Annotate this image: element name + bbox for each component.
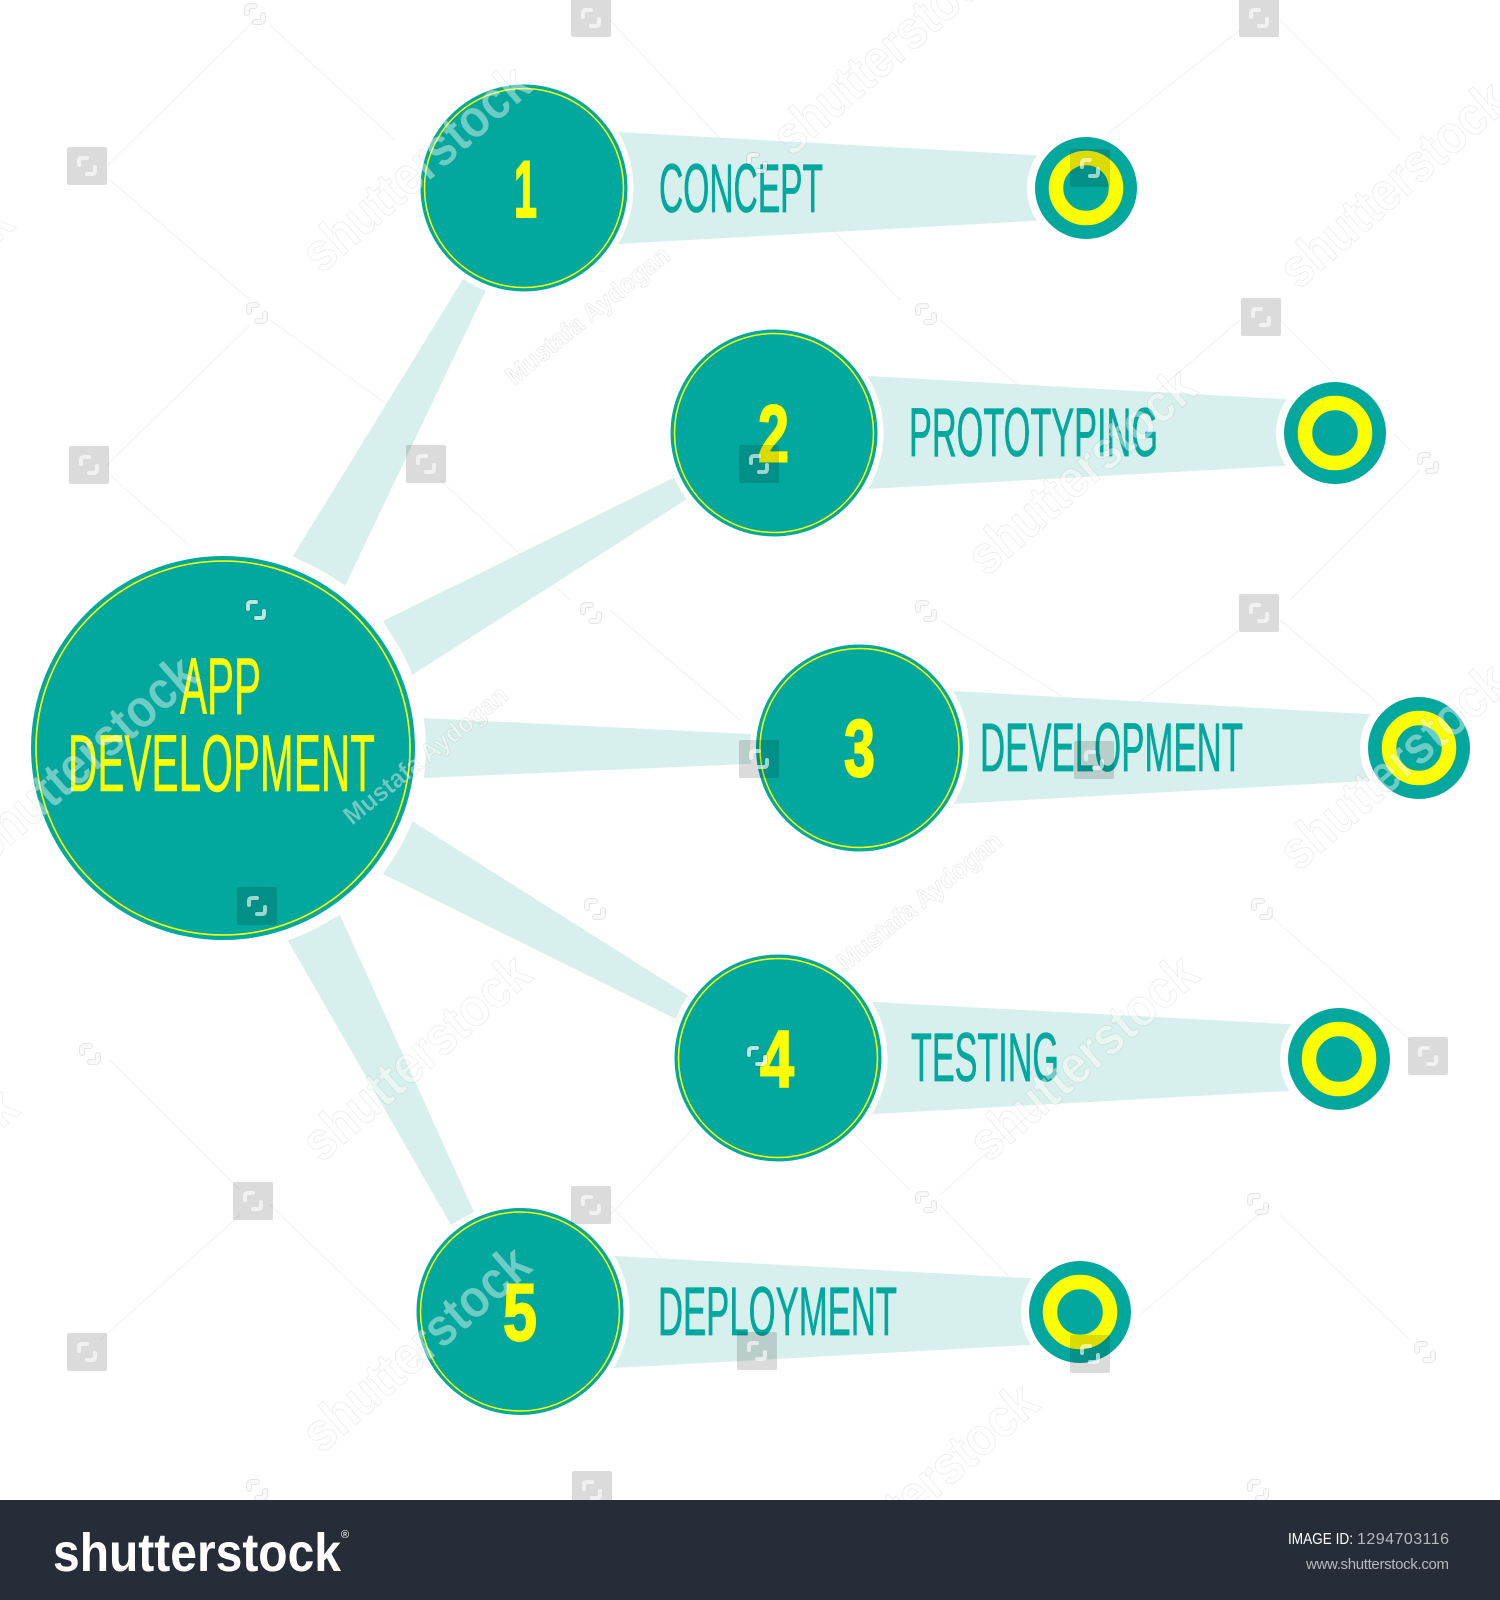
node 2: prototyping	[664, 324, 1394, 542]
node 3: development: 3	[844, 704, 875, 794]
hub: app development	[20, 545, 426, 951]
node 5: deployment	[410, 1202, 1139, 1421]
node 4: testing	[668, 948, 1398, 1168]
hub title: APP	[180, 642, 261, 732]
hub title	[68, 642, 375, 809]
node 4: testing: 4	[760, 1015, 794, 1105]
node 1: concept: CONCEPT	[659, 150, 823, 227]
watermark overlay: Mustafa Aydogan	[499, 239, 676, 391]
image id number: 1294703116	[1357, 1531, 1449, 1548]
node 3: development: DEVELOPMENT	[980, 709, 1243, 786]
watermark overlay: shutterstock	[290, 1233, 543, 1464]
watermark overlay: shutterstock	[797, 1371, 1050, 1600]
watermark overlay: shutterstock	[955, 356, 1208, 587]
logo registered mark: ®	[341, 1529, 349, 1541]
hub title: DEVELOPMENT	[68, 719, 375, 809]
node 2: prototyping: 2	[758, 390, 789, 480]
node 3: development	[750, 638, 1478, 858]
node 5: deployment: DEPLOYMENT	[658, 1273, 897, 1350]
watermark overlay: shutterstock	[290, 942, 543, 1173]
watermark overlay: Mustafa Aydogan	[831, 825, 1008, 977]
image id: IMAGE ID:	[1288, 1531, 1353, 1548]
footer logo: shutterstock	[53, 1523, 342, 1583]
watermark overlay: shutterstock	[957, 942, 1210, 1173]
watermark overlay: shutterstock	[290, 53, 543, 284]
website: www.shutterstock.com	[1305, 1556, 1449, 1573]
footer bar	[0, 1500, 1500, 1600]
node 4: testing: TESTING	[911, 1019, 1059, 1096]
node 5: deployment: 5	[503, 1268, 537, 1358]
watermark overlay: Mustafa Aydogan	[337, 679, 514, 831]
node 1: concept: 1	[514, 145, 537, 235]
connectors from hub to nodes	[287, 279, 770, 1225]
node 2: prototyping: PROTOTYPING	[909, 394, 1158, 471]
node 1: concept	[414, 78, 1145, 298]
